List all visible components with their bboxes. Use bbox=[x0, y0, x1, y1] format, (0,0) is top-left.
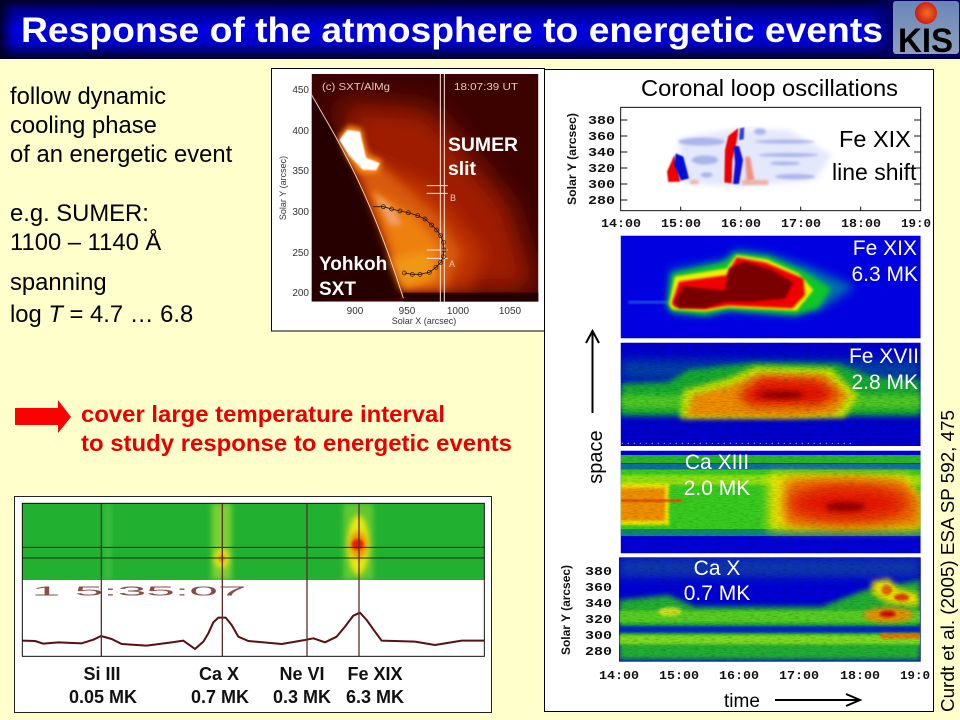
label: Fe XVII 2.8 MK bbox=[849, 345, 919, 394]
chart: Fe XIX line shift: Solar Y (arcsec) bbox=[565, 113, 579, 205]
panel: Yohkoh SXT image: A bbox=[449, 259, 455, 269]
panel: Yohkoh SXT image: Solar X (arcsec) bbox=[392, 316, 456, 326]
arrow: time axis bbox=[775, 694, 860, 706]
label: space: space bbox=[585, 430, 607, 484]
label: Yohkoh SXT: SXT bbox=[319, 279, 356, 300]
loop fit bbox=[373, 205, 446, 276]
heatmap: Ca X 0.7 MK: 380 bbox=[585, 566, 612, 579]
chart: Fe XIX line shift: 17:00 bbox=[781, 218, 821, 231]
labels: spectral lines: 0.3 MK bbox=[273, 687, 331, 707]
panel: Yohkoh SXT image: 250 bbox=[292, 248, 309, 259]
text block: introduction: e.g. SUMER: bbox=[10, 200, 149, 227]
panel: coronal loop oscillations bbox=[544, 70, 934, 712]
chart: Fe XIX line shift: 280 bbox=[588, 195, 615, 208]
label: Fe XVII 2.8 MK: 2.8 MK bbox=[851, 371, 918, 394]
title bar bbox=[0, 0, 960, 59]
text block: introduction: 1100 – 1140 Å bbox=[10, 228, 161, 256]
label: Ca XIII 2.0 MK: 2.0 MK bbox=[684, 477, 750, 500]
timestamp: 1 5:35:07 bbox=[32, 583, 247, 598]
chart: Fe XIX line shift: 380 bbox=[588, 115, 615, 128]
text block: introduction: cooling phase bbox=[10, 112, 157, 139]
panel: Yohkoh SXT image: 1050 bbox=[499, 306, 522, 317]
label: Yohkoh SXT bbox=[319, 254, 387, 300]
icon: KIS logo bbox=[893, 1, 959, 60]
spectrum curve bbox=[22, 613, 484, 649]
panel: Yohkoh SXT image: 900 bbox=[347, 306, 364, 317]
panel: Yohkoh SXT image: 450 bbox=[292, 85, 309, 96]
label: Ca X 0.7 MK: 0.7 MK bbox=[684, 582, 750, 605]
label: Ca X 0.7 MK: Ca X bbox=[694, 557, 740, 580]
label: Fe XIX 6.3 MK: Fe XIX bbox=[853, 237, 917, 260]
heatmap: Fe XIX 6.3 MK bbox=[621, 236, 921, 338]
panel: Yohkoh SXT image: B bbox=[450, 193, 456, 203]
label: Fe XIX line shift bbox=[832, 126, 917, 185]
panel: Yohkoh SXT image: 200 bbox=[292, 288, 309, 299]
panel: Yohkoh SXT image: 300 bbox=[292, 207, 309, 218]
heatmap: Ca X 0.7 MK: 14:00 bbox=[599, 670, 639, 683]
label: Yohkoh SXT: Yohkoh bbox=[319, 254, 387, 275]
labels: spectral lines: Ne VI bbox=[279, 664, 325, 684]
chart: Fe XIX line shift: 15:00 bbox=[661, 218, 701, 231]
heatmap: Ca XIII 2.0 MK bbox=[621, 451, 921, 553]
label: Ca XIII 2.0 MK: Ca XIII bbox=[685, 451, 749, 474]
chart: Fe XIX line shift: 320 bbox=[588, 163, 615, 176]
labels: spectral lines: Fe XIX bbox=[347, 664, 403, 684]
label: SUMER slit bbox=[448, 134, 518, 180]
arrow: space axis bbox=[586, 331, 599, 413]
label: Fe XIX line shift: Fe XIX bbox=[839, 126, 911, 152]
heatmap: Ca X 0.7 MK: 360 bbox=[585, 582, 612, 595]
chart: Fe XIX line shift: 360 bbox=[588, 131, 615, 144]
text block: introduction: follow dynamic bbox=[10, 83, 166, 110]
label: Ca X 0.7 MK bbox=[684, 557, 750, 605]
labels: spectral lines: Ca X bbox=[199, 664, 239, 684]
panel: Yohkoh SXT image bbox=[272, 68, 544, 331]
heatmap: Ca X 0.7 MK: 340 bbox=[585, 598, 612, 611]
panel: Yohkoh SXT image: 950 bbox=[399, 306, 416, 317]
heatmap: Ca X 0.7 MK: 15:00 bbox=[659, 670, 699, 683]
labels: spectral lines: Si III bbox=[83, 664, 121, 684]
label: Ca XIII 2.0 MK bbox=[684, 451, 750, 500]
crosshair lines bbox=[22, 503, 484, 656]
heatmap: Ca X 0.7 MK: 320 bbox=[585, 614, 612, 627]
icon: KIS logo: KIS bbox=[898, 22, 953, 60]
panel: SUMER spectrum bbox=[14, 496, 492, 712]
chart: Fe XIX line shift: 14:00 bbox=[601, 218, 641, 231]
title: Response of the atmosphere to energetic events bbox=[21, 10, 883, 50]
chart: Fe XIX line shift bbox=[565, 107, 931, 231]
chart: Fe XIX line shift: 300 bbox=[588, 179, 615, 192]
label: SUMER slit: slit bbox=[448, 158, 477, 180]
label: time: time bbox=[724, 691, 760, 712]
citation: Curdt et al. (2005) ESA SP 592, 475 bbox=[938, 410, 958, 712]
heatmap: Ca X 0.7 MK: 280 bbox=[585, 646, 612, 659]
label: Fe XIX 6.3 MK: 6.3 MK bbox=[851, 263, 918, 286]
heatmap: Ca X 0.7 MK bbox=[559, 557, 930, 683]
arrow: red conclusion arrow bbox=[15, 400, 71, 433]
chart: Fe XIX line shift: 16:00 bbox=[721, 218, 761, 231]
heatmap: Ca X 0.7 MK: Solar Y (arcsec) bbox=[559, 565, 573, 655]
heatmap: Ca X 0.7 MK: 300 bbox=[585, 630, 612, 643]
chart: Fe XIX line shift: 19:0 bbox=[901, 218, 931, 231]
callout: conclusion text: to study response to energetic events bbox=[81, 430, 512, 456]
label: Fe XIX 6.3 MK bbox=[851, 237, 918, 286]
panel: Yohkoh SXT image: 400 bbox=[292, 126, 309, 137]
text block: introduction: of an energetic event bbox=[10, 141, 233, 168]
labels: spectral lines bbox=[69, 664, 404, 707]
labels: spectral lines: 6.3 MK bbox=[346, 687, 404, 707]
panel: Yohkoh SXT image: 350 bbox=[292, 166, 309, 177]
heatmap: Ca X 0.7 MK: 18:00 bbox=[840, 670, 880, 683]
heatmap: Ca X 0.7 MK: 16:00 bbox=[719, 670, 759, 683]
labels: spectral lines: 0.05 MK bbox=[69, 687, 137, 707]
label: SUMER slit: SUMER bbox=[448, 134, 518, 156]
label: Fe XVII 2.8 MK: Fe XVII bbox=[849, 345, 919, 368]
panel: Yohkoh SXT image: Solar Y (arcsec) bbox=[278, 156, 288, 220]
text block: introduction bbox=[10, 83, 233, 328]
chart: Fe XIX line shift: 340 bbox=[588, 147, 615, 160]
text block: introduction: spanning bbox=[10, 269, 107, 296]
callout: conclusion text bbox=[81, 401, 512, 456]
panel: Yohkoh SXT image: 1000 bbox=[447, 306, 470, 317]
callout: conclusion text: cover large temperature interval bbox=[81, 401, 445, 427]
heatmap: Ca X 0.7 MK: 17:00 bbox=[779, 670, 819, 683]
SUMER slit lines bbox=[427, 74, 448, 302]
panel: Yohkoh SXT image: 18:07:39 UT bbox=[454, 81, 519, 93]
text block: introduction: log T = 4.7 … 6.8 bbox=[10, 301, 193, 328]
labels: spectral lines: 0.7 MK bbox=[191, 687, 249, 707]
heatmap: Fe XVII 2.8 MK bbox=[621, 343, 921, 446]
label: Fe XIX line shift: line shift bbox=[832, 159, 917, 185]
heading: coronal loop oscillations: Coronal loop oscillations bbox=[641, 75, 898, 101]
chart: Fe XIX line shift: 18:00 bbox=[841, 218, 881, 231]
heatmap: Ca X 0.7 MK: 19:0 bbox=[900, 670, 930, 683]
spectrogram image bbox=[22, 503, 484, 580]
panel: Yohkoh SXT image: (c) SXT/AlMg bbox=[322, 81, 390, 93]
